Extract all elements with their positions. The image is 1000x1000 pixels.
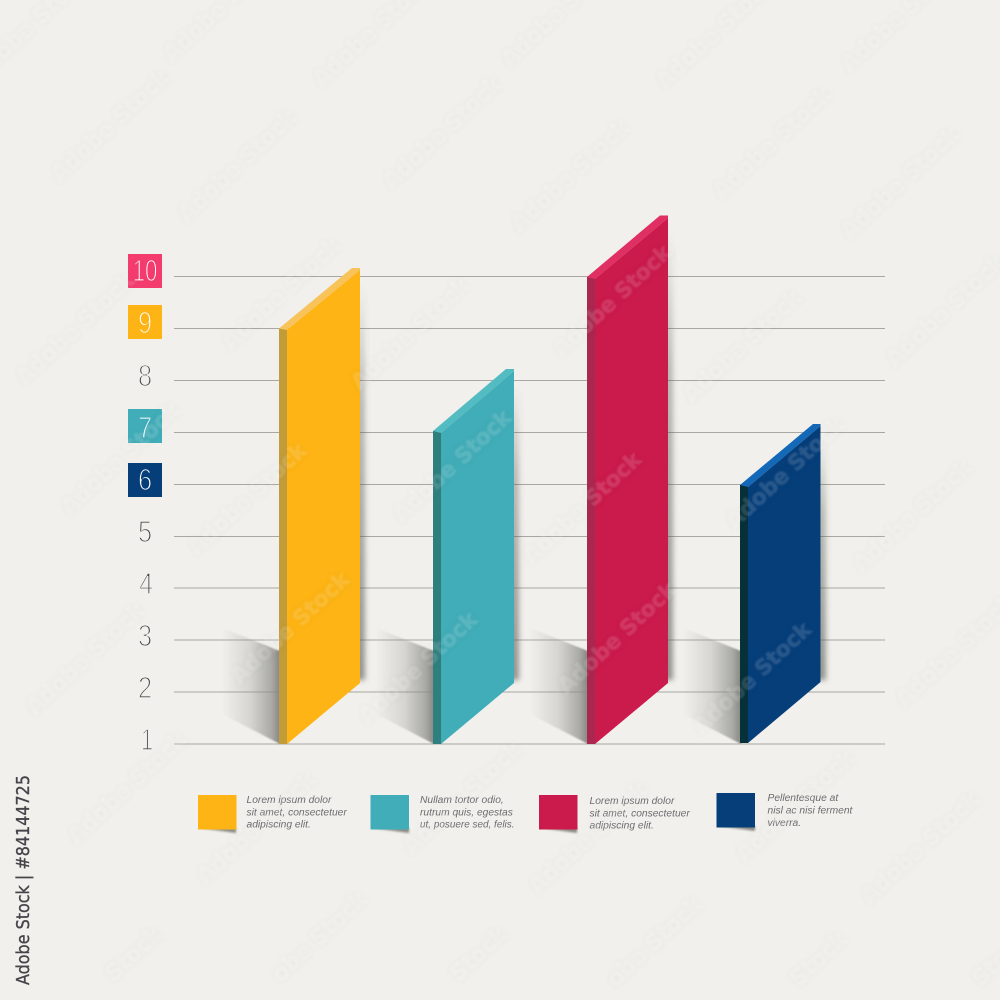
watermark: Adobe Stock bbox=[389, 405, 517, 527]
watermark: Adobe Stock bbox=[347, 273, 475, 395]
side shadow: teal bbox=[509, 386, 519, 680]
watermark: Adobe Stock bbox=[57, 398, 185, 520]
bar side bbox=[740, 485, 748, 743]
watermark: Adobe Stock bbox=[679, 285, 807, 407]
legend item: navy bbox=[716, 793, 854, 831]
watermark: Stock bbox=[786, 927, 853, 991]
bar top bbox=[279, 268, 360, 330]
tile: 9 bbox=[128, 305, 162, 339]
legend item: teal bbox=[370, 795, 514, 833]
watermark: Adobe Stock bbox=[554, 577, 682, 699]
bar: navy, value 6 bbox=[683, 424, 826, 744]
label: 3: 3 bbox=[138, 619, 152, 654]
tile: 10 bbox=[128, 254, 162, 288]
stock id caption: Adobe Stock | #84144725 bbox=[14, 775, 34, 985]
legend item: teal: Nullam tortor odio, bbox=[420, 795, 504, 806]
legend item: teal: ut, posuere sed, felis. bbox=[420, 820, 514, 831]
watermark: Adobe Stock bbox=[22, 598, 150, 720]
legend item: crimson: sit amet, consectetuer bbox=[590, 808, 690, 819]
bar side bbox=[587, 277, 595, 744]
watermark: Stock bbox=[446, 922, 513, 986]
label: 10: 10 bbox=[133, 253, 157, 288]
floor shadow: teal bbox=[376, 628, 434, 744]
watermark: Adobe Stock bbox=[689, 617, 817, 739]
bar: yellow, value 9 bbox=[222, 268, 365, 744]
floor shadow: crimson bbox=[530, 628, 588, 744]
legend item: crimson: Lorem ipsum dolor bbox=[590, 796, 675, 807]
watermark: Adobe Stock bbox=[355, 607, 483, 729]
watermark: Adobe Stock bbox=[722, 412, 850, 534]
grid lines bbox=[174, 276, 885, 744]
bar: teal, value 7 bbox=[376, 369, 519, 744]
watermark: Adobe Stock bbox=[218, 233, 346, 355]
floor shadow: navy bbox=[683, 628, 741, 744]
legend item: navy: nisl ac nisi ferment bbox=[768, 806, 854, 816]
watermark: Adobe Stock bbox=[64, 727, 192, 849]
watermark: Adobe Stock bbox=[174, 105, 302, 227]
bar face bbox=[287, 270, 360, 744]
watermark: Adobe Stock bbox=[709, 82, 837, 204]
legend item: yellow: Lorem ipsum dolor bbox=[246, 795, 332, 806]
tile: 6 bbox=[128, 463, 162, 497]
bar side bbox=[279, 328, 287, 744]
legend bbox=[198, 793, 854, 833]
label: 7: 7 bbox=[138, 411, 152, 446]
legend item: teal: rutrum quis, egestas bbox=[420, 807, 513, 818]
legend item: yellow bbox=[198, 795, 347, 833]
watermark: Adobe Stock bbox=[193, 767, 321, 889]
bar face bbox=[441, 371, 514, 744]
legend item: navy: viverra. bbox=[768, 818, 801, 829]
label: 4: 4 bbox=[139, 567, 153, 602]
bar: crimson, value 10 bbox=[530, 216, 673, 744]
bar face bbox=[595, 218, 668, 744]
bar top bbox=[587, 216, 668, 279]
side shadow: navy bbox=[816, 440, 826, 680]
legend item: yellow: sit amet, consectetuer bbox=[246, 807, 347, 818]
watermark: obe Stock bbox=[267, 887, 373, 987]
watermark: Adobe Stock bbox=[519, 447, 647, 569]
watermark: Adobe Stock bbox=[857, 787, 985, 909]
watermark: Adobe Stock bbox=[507, 115, 635, 237]
watermark: Adobe Stock bbox=[399, 737, 527, 859]
legend item: crimson bbox=[539, 795, 690, 833]
tile: 7 bbox=[128, 409, 162, 443]
side shadow: crimson bbox=[663, 235, 673, 680]
watermark: Stock bbox=[101, 922, 168, 986]
label: 8: 8 bbox=[138, 359, 152, 394]
watermark: Adobe Stock bbox=[732, 745, 860, 867]
watermark: Adobe Stock bbox=[12, 268, 140, 390]
watermark: Adobe Stock bbox=[525, 777, 653, 899]
legend item: crimson: adipiscing elit. bbox=[590, 821, 654, 832]
watermark: Adobe Stock bbox=[837, 122, 965, 244]
watermark: Adobe Stock bbox=[227, 567, 355, 689]
watermark: Adobe Stock bbox=[47, 65, 175, 187]
bar face bbox=[748, 426, 820, 743]
bar top bbox=[433, 369, 514, 433]
watermark: Adobe Stock bbox=[849, 455, 977, 577]
label: 1: 1 bbox=[141, 722, 153, 757]
floor shadow: yellow bbox=[222, 628, 280, 744]
bar side bbox=[433, 431, 441, 744]
label: 2: 2 bbox=[138, 671, 152, 706]
side shadow: yellow bbox=[355, 285, 365, 680]
watermark: Adobe Stock bbox=[549, 240, 677, 362]
bar top bbox=[740, 424, 820, 487]
label: 6: 6 bbox=[138, 463, 152, 498]
label: 5: 5 bbox=[138, 515, 152, 550]
label: 9: 9 bbox=[138, 306, 152, 341]
legend item: yellow: adipiscing elit. bbox=[246, 820, 311, 831]
y axis scale bbox=[128, 253, 162, 757]
legend item: navy: Pellentesque at bbox=[768, 793, 839, 804]
watermark: obe Stock bbox=[602, 892, 708, 992]
watermark: Adobe Stock bbox=[184, 438, 312, 560]
watermark: Adobe Stock bbox=[379, 72, 507, 194]
